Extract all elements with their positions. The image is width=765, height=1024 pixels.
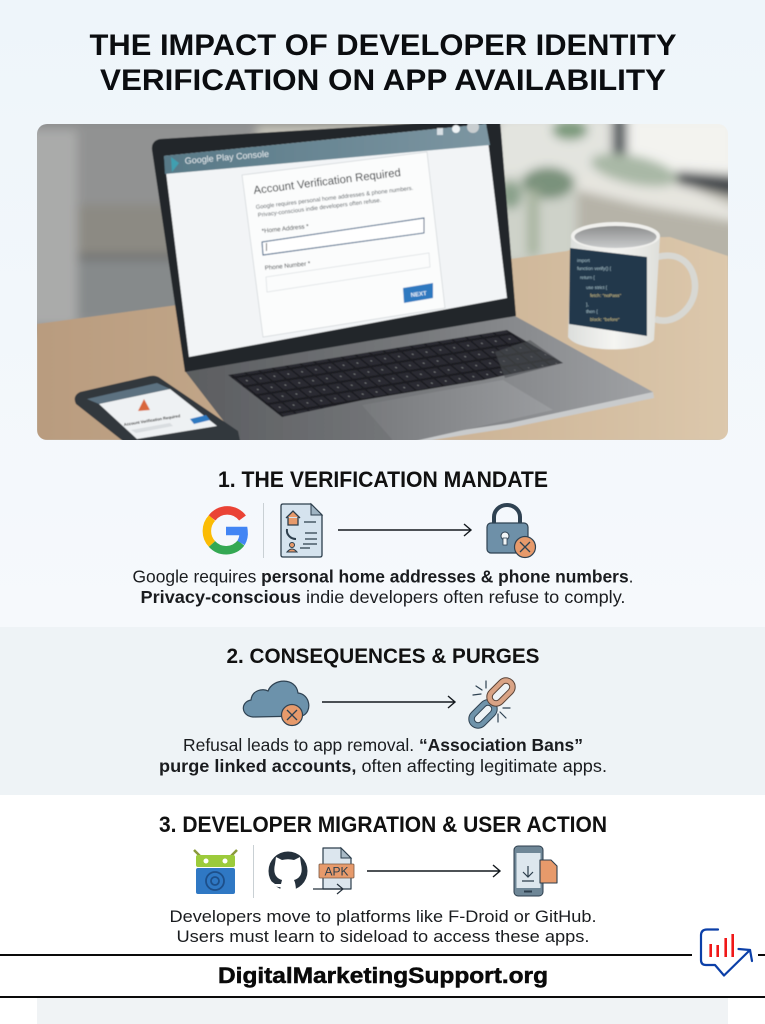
photo background room: [27, 114, 738, 450]
play logo: [171, 157, 179, 172]
footer rule: [0, 954, 765, 998]
bottom panel: [37, 998, 728, 1024]
section 3 heading: 3. DEVELOPER MIGRATION & USER ACTION: [159, 812, 607, 837]
section 1 body text: [132, 566, 634, 607]
section 2 body text: Refusal leads to app removal. “Association Bans”: [183, 735, 583, 755]
section 2 band: [0, 627, 765, 795]
function keys: [495, 340, 563, 378]
screen: [164, 124, 507, 357]
icon: APK file: [313, 848, 354, 894]
dialog card: Privacy-conscious indie developers often refuse.: [258, 198, 382, 219]
mug: block: "before": [590, 317, 620, 322]
icon: broken chain link: [469, 678, 515, 728]
section 3 body text: Developers move to platforms like F-Droid or GitHub.: [170, 907, 596, 926]
icon: brand logo: [701, 930, 752, 976]
icon: F-Droid: [194, 850, 237, 894]
icon: locked padlock: [487, 505, 536, 558]
keyboard: [228, 330, 563, 417]
section 2 body text: [159, 735, 607, 776]
icon: cloud with error badge: [243, 681, 309, 726]
section 1 heading: 1. THE VERIFICATION MANDATE: [218, 467, 548, 492]
footer site name: DigitalMarketingSupport.org: [218, 963, 548, 988]
dialog card: Google requires personal home addresses & phone numbers.: [256, 186, 414, 211]
section 3 body text: Users must learn to sideload to access these apps.: [176, 927, 590, 946]
trackpad: [371, 380, 552, 440]
laptop lid: [152, 119, 516, 372]
section 1 body text: Google requires personal home addresses & phone numbers.: [132, 566, 634, 586]
arrow: [367, 865, 500, 877]
dialog card: Phone Number *: [264, 260, 311, 272]
console header text: Google Play Console: [184, 149, 269, 166]
divider: [253, 845, 254, 898]
top icons: [437, 125, 460, 135]
title: VERIFICATION ON APP AVAILABILITY: [100, 64, 666, 97]
dialog card: NEXT: [411, 291, 427, 299]
dialog card: [242, 152, 445, 337]
laptop deck: [185, 316, 653, 445]
section 1 body text: Privacy-conscious indie developers often refuse to comply.: [140, 587, 626, 607]
section 2 body text: purge linked accounts, often affecting legitimate apps.: [159, 756, 607, 776]
mug: import: [577, 258, 590, 263]
section 3 background: [0, 795, 765, 1024]
mug: [568, 222, 695, 349]
upper background: [0, 0, 765, 627]
arrow: [322, 696, 455, 708]
mug: fetch: "noPass": [590, 293, 621, 298]
table: [37, 237, 728, 440]
mug: use strict {: [586, 285, 608, 290]
divider: [263, 503, 264, 558]
deck front edge: [417, 392, 654, 440]
arrow: [338, 524, 471, 536]
section 3 body text: [170, 907, 596, 946]
icon: google logo: [207, 510, 244, 550]
icon: address document: [281, 504, 322, 557]
dialog card: *Home Address *: [261, 223, 310, 235]
mug: then {: [586, 309, 598, 314]
section 2 heading: 2. CONSEQUENCES & PURGES: [226, 645, 540, 668]
title: [90, 29, 677, 97]
console header: [164, 124, 490, 174]
mug: },: [586, 302, 589, 307]
smartphone: Account Verification Required: [123, 413, 181, 427]
icon: GitHub: [268, 852, 308, 892]
smartphone: [75, 376, 241, 445]
mug: function verify() {: [577, 266, 612, 271]
mug: return {: [580, 275, 595, 280]
title: THE IMPACT OF DEVELOPER IDENTITY: [90, 29, 677, 62]
icon: APK file: APK: [324, 864, 349, 878]
icon: phone download: [514, 846, 557, 896]
dialog card: Account Verification Required: [253, 167, 401, 197]
photo: laptop showing the account verification form: [27, 114, 738, 450]
